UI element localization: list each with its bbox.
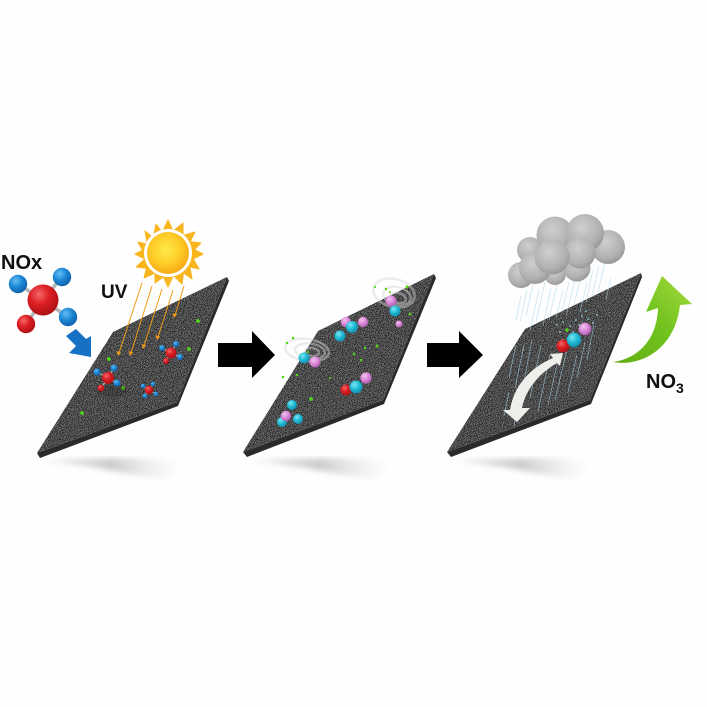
rain streaks bbox=[504, 262, 611, 426]
slab surface 1 bbox=[37, 277, 229, 458]
arrow: step 1 to step 2 bbox=[218, 331, 275, 378]
surface shadow 1 bbox=[40, 458, 183, 479]
molecule: top right group bbox=[386, 296, 402, 328]
green particle 3 bbox=[565, 328, 569, 332]
arrow: white double-headed cycle bbox=[503, 353, 563, 422]
slab surface 2 bbox=[236, 268, 441, 458]
panel: step 1 NOx adsorption under UV bbox=[1, 220, 235, 479]
surface shadow 3 bbox=[451, 458, 592, 479]
UV label: UV bbox=[101, 282, 128, 303]
arrow: NOx to surface bbox=[66, 329, 91, 357]
molecule: lower cluster bbox=[277, 400, 303, 427]
ripple rings left bbox=[284, 336, 330, 364]
panel: step 3 rain wash-off bbox=[440, 214, 692, 479]
molecule: centre trio bbox=[340, 372, 372, 396]
panel: step 2 reactive species bbox=[236, 268, 441, 479]
molecule: NO3 on surface bbox=[556, 323, 591, 352]
water droplets bbox=[556, 310, 598, 333]
NO3 label: NO bbox=[646, 371, 676, 393]
molecule: upper cluster bbox=[334, 317, 368, 342]
NOx label: NOx bbox=[1, 252, 42, 274]
NO3 label: 3 bbox=[676, 380, 684, 396]
slab surface 3 bbox=[440, 268, 645, 458]
icon: rain cloud bbox=[508, 214, 625, 288]
arrow: green NO3 release bbox=[613, 276, 692, 363]
molecule: large adsorbed NOx bbox=[94, 364, 128, 397]
green particles 2 bbox=[282, 286, 411, 401]
arrows: UV rays bbox=[116, 283, 184, 356]
ripple rings right bbox=[370, 274, 418, 312]
surface shadow 2 bbox=[248, 458, 392, 479]
icon: NOx molecule bbox=[9, 268, 77, 333]
molecule: left pair bbox=[298, 352, 320, 368]
molecule: right adsorbed NOx bbox=[159, 341, 183, 364]
arrow: step 2 to step 3 bbox=[427, 331, 483, 378]
green particles 1 bbox=[80, 319, 200, 415]
icon: sun bbox=[135, 220, 203, 287]
molecule: small adsorbed NOx bbox=[141, 382, 158, 398]
